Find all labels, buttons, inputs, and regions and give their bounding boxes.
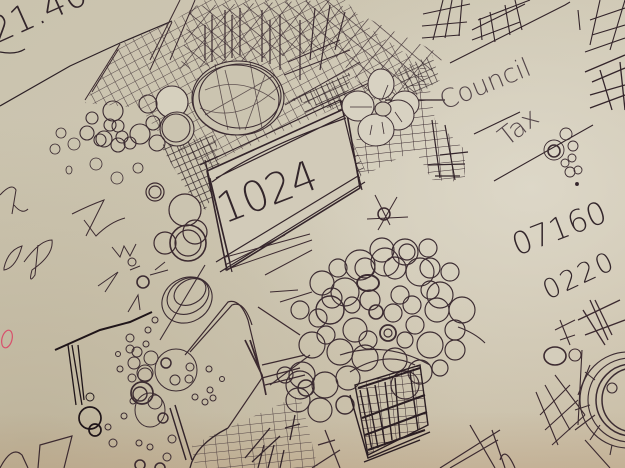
bouquet of looping circles — [270, 238, 485, 422]
circles below plaque corner — [146, 183, 207, 261]
hatch rays above bouquet — [222, 234, 312, 302]
phone numbers on right: 07160 — [507, 195, 612, 263]
hatch and circles lower right — [536, 300, 625, 468]
phone numbers on right — [507, 195, 620, 306]
crosshatched banner behind the plaque — [85, 0, 445, 210]
Council Tax handwriting: Tax — [493, 102, 545, 153]
thick pen line and post — [55, 312, 152, 436]
long pen line — [0, 21, 172, 106]
Council Tax handwriting — [435, 53, 545, 153]
note shape bottom left — [0, 436, 165, 468]
bubble cluster — [105, 317, 224, 461]
plaque with 1024 — [200, 100, 365, 272]
margin scribbles left — [0, 187, 125, 279]
hatched panel bottom centre — [190, 395, 318, 468]
ruled lines around Council Tax — [450, 2, 593, 181]
star doodle — [367, 195, 408, 230]
sparks and small rings — [98, 244, 168, 312]
top hatch patches — [422, 0, 625, 110]
hatch right of flower — [350, 55, 468, 185]
red ink mark — [0, 329, 14, 349]
Council Tax handwriting: Council — [435, 53, 535, 116]
phone numbers on right: 0220 — [538, 246, 620, 306]
flower — [342, 69, 419, 146]
large concentric clock circle — [575, 352, 625, 455]
hatched shape bottom middle — [312, 425, 515, 468]
small scribble near Tax — [544, 128, 582, 186]
flower pot — [350, 365, 430, 462]
concentric ellipse doodle — [153, 265, 221, 340]
small circle cluster left of big circle — [50, 86, 194, 184]
triangular outline shape — [185, 301, 305, 428]
plaque number: 1024 — [210, 151, 324, 233]
big circle — [192, 61, 284, 135]
